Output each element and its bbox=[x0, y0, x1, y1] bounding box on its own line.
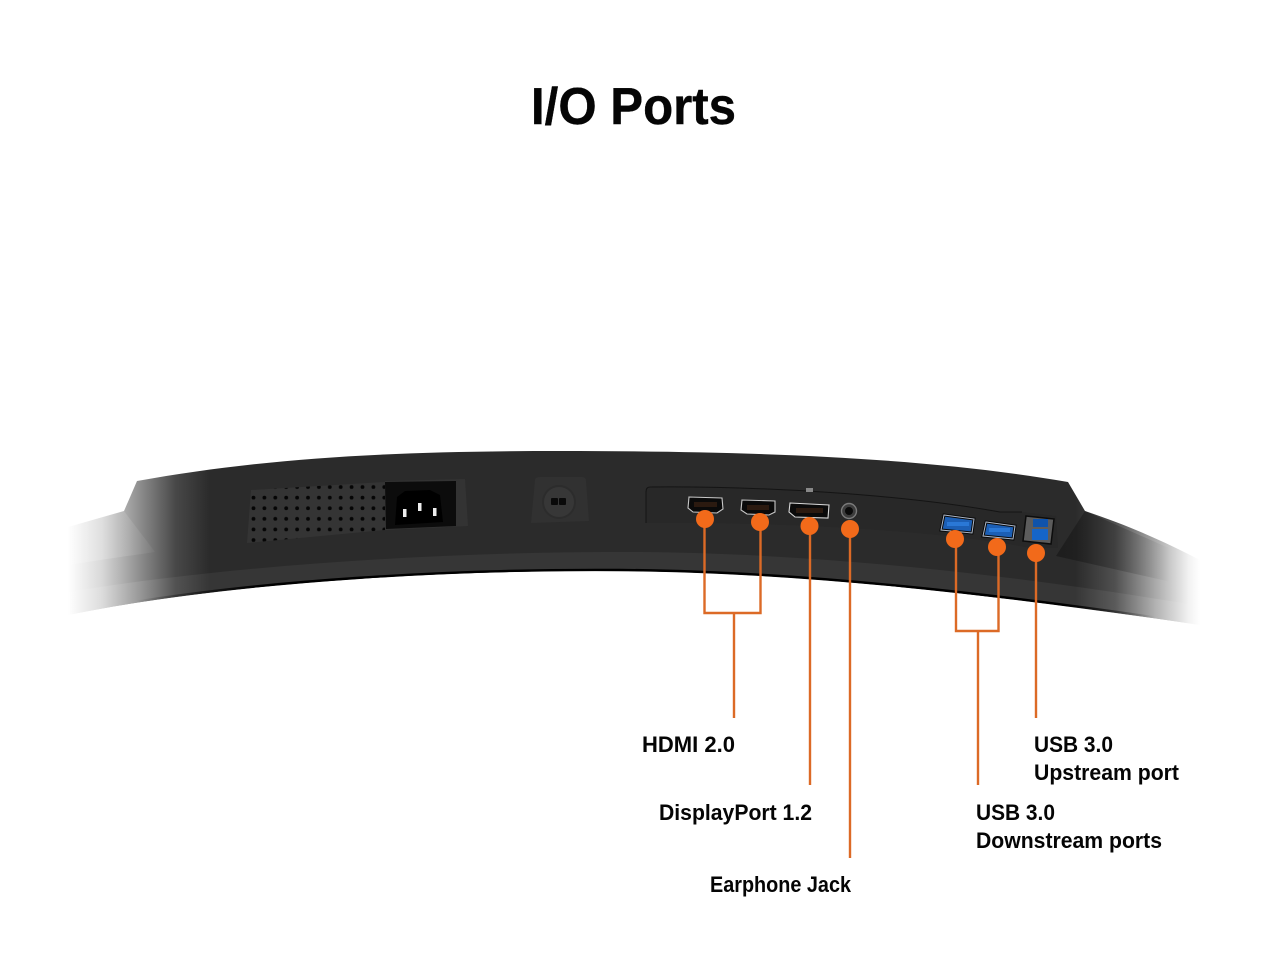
power socket bbox=[385, 479, 468, 530]
HDMI port 2 bbox=[741, 500, 775, 515]
earphone jack bbox=[842, 504, 856, 518]
label: USB 3.0 Downstream ports: USB 3.0 bbox=[976, 800, 1055, 825]
USB 3.0 downstream port 2 bbox=[983, 522, 1015, 539]
label: USB 3.0 Upstream port bbox=[1034, 732, 1180, 785]
bezel dark edge bbox=[68, 570, 1200, 624]
connector: USB 3.0 Downstream bbox=[956, 539, 998, 785]
USB 3.0 upstream port bbox=[1023, 516, 1054, 544]
right fold shadow bbox=[1056, 511, 1180, 584]
label: USB 3.0 Upstream port: USB 3.0 bbox=[1034, 732, 1113, 757]
connector: DisplayPort 1.2 bbox=[809, 526, 811, 785]
label: DisplayPort 1.2: DisplayPort 1.2 bbox=[659, 800, 812, 825]
left fold highlight bbox=[68, 511, 155, 565]
marker dots bbox=[696, 510, 1045, 562]
port panel top edge bbox=[646, 487, 1022, 523]
label: USB 3.0 Downstream ports bbox=[976, 800, 1162, 853]
connector: HDMI 2.0 bbox=[704, 519, 760, 718]
connector: USB 3.0 Upstream bbox=[1035, 553, 1037, 718]
security lock slot bbox=[531, 477, 589, 523]
monitor underside bbox=[68, 451, 1200, 625]
title: I/O Ports bbox=[531, 78, 736, 136]
DisplayPort bbox=[789, 488, 829, 518]
USB 3.0 downstream port 1 bbox=[941, 515, 974, 533]
front bezel strip bbox=[68, 552, 1200, 625]
label: HDMI 2.0: HDMI 2.0 bbox=[642, 732, 735, 757]
label: USB 3.0 Upstream port: Upstream port bbox=[1034, 760, 1180, 785]
speaker grille bbox=[247, 482, 385, 543]
HDMI port 1 bbox=[688, 497, 723, 513]
port panel bbox=[646, 487, 1058, 548]
connector: Earphone Jack bbox=[849, 529, 851, 858]
monitor body bbox=[68, 451, 1200, 625]
label: Earphone Jack: Earphone Jack bbox=[710, 872, 852, 897]
label: USB 3.0 Downstream ports: Downstream ports bbox=[976, 828, 1162, 853]
